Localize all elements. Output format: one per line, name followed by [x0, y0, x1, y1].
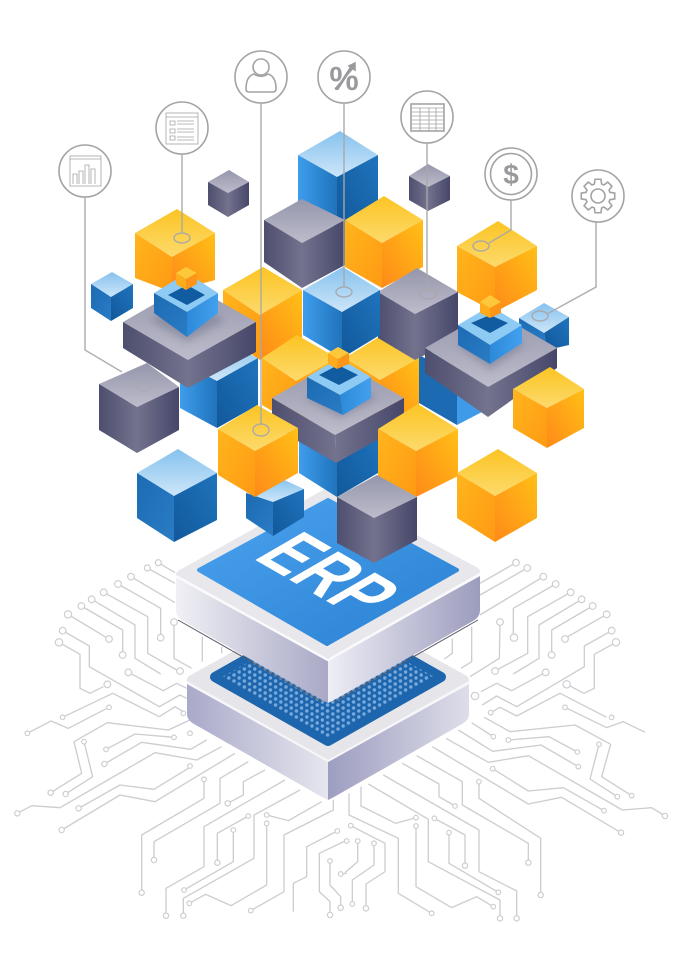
upper chip layer [176, 493, 480, 703]
cube: center yellow left [223, 267, 302, 360]
stack of isometric cubes [91, 131, 584, 563]
platform: right dark plate with blue box [425, 295, 557, 417]
cube: blue under right plate [419, 355, 498, 425]
cube: lower left blue [137, 449, 217, 542]
icon: spreadsheet table [401, 91, 453, 143]
ERP label on chip: ERP [236, 521, 420, 628]
cube: small dark right [409, 164, 450, 211]
icon: bar chart window [59, 145, 111, 197]
icon: percent with arrow: % [329, 60, 359, 97]
cube: small blue below yellow [246, 478, 304, 536]
cube: small dark left [208, 170, 249, 217]
platform: center dark plate with blue box [272, 347, 404, 463]
cube: mid yellow [262, 335, 337, 425]
platform: left dark plate with blue box [123, 267, 256, 388]
cube: left yellow [135, 209, 215, 292]
cube: right yellow [457, 221, 537, 312]
cube: upper yellow [345, 196, 423, 288]
cube: blue behind left [180, 340, 258, 428]
cube: front yellow right [378, 404, 458, 497]
cube: upper dark [264, 199, 345, 288]
circuit traces: left side [15, 560, 347, 918]
cube: dark lower left [99, 363, 179, 453]
cube: front yellow left [218, 405, 298, 497]
icon: percent with arrow [318, 51, 370, 103]
icon: person [235, 51, 287, 103]
icon: gear [572, 170, 624, 222]
cube: top blue [298, 131, 378, 228]
lower chip layer [187, 605, 469, 800]
icon: dollar coin [485, 148, 537, 200]
cube: blue under center plate [299, 420, 378, 497]
icon: dollar coin: $ [503, 159, 519, 190]
cube: center blue [303, 267, 380, 358]
cube: center yellow back [345, 335, 419, 425]
circuit traces: right side [344, 559, 668, 921]
cube: small blue left [91, 272, 133, 321]
connector lines and rings [85, 103, 596, 436]
cube: lower right yellow [457, 449, 537, 542]
cube: center dark right [378, 268, 458, 360]
icon: form document [156, 102, 208, 154]
cube: dark on chip [337, 475, 417, 563]
cube: far right yellow [513, 367, 584, 448]
cube: small blue right [519, 303, 569, 350]
